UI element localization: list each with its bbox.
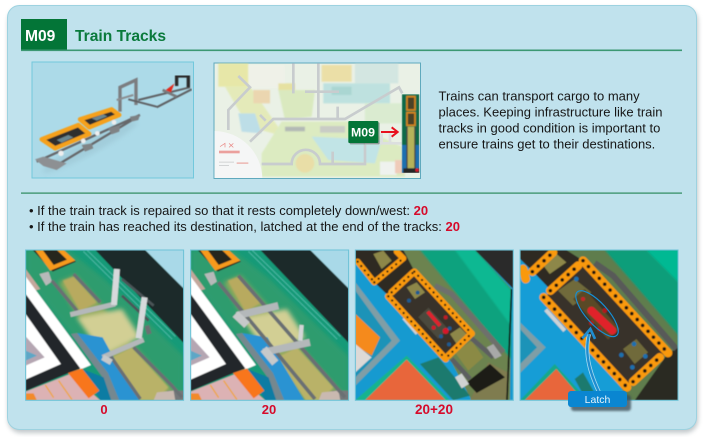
heading: Train Tracks: Train Tracks <box>75 28 166 45</box>
text block: scoring rules <box>29 203 460 234</box>
arrow: to mission location <box>381 127 398 137</box>
text block: mission description: ensure trains get to their destinations. <box>438 136 655 152</box>
text block: scoring rules: • If the train has reached its destination, latched at the end of the tracks: 20 <box>29 219 460 234</box>
label: M09 on map <box>348 121 380 144</box>
arrow: points to latch <box>582 329 599 392</box>
image: field map with M09 location <box>214 63 420 178</box>
annotation: latch ellipse <box>569 285 625 343</box>
photo: track not repaired, 0 points <box>26 250 184 400</box>
score label: 20+20: 20+20 <box>415 402 453 417</box>
header: mission number badge: M09 <box>25 28 56 45</box>
label: Latch: Latch <box>585 394 611 406</box>
photo: latch close-up <box>520 250 682 400</box>
score label: 20: 20 <box>262 402 276 417</box>
text block: mission description: places. Keeping infrastructure like train <box>438 104 663 120</box>
divider <box>21 192 682 194</box>
header rule <box>21 50 682 51</box>
label: Latch <box>568 391 631 411</box>
photo: track repaired, 20 points <box>191 250 349 400</box>
score label: 0: 0 <box>100 402 108 417</box>
image: train track model <box>32 62 194 178</box>
text block: scoring rules: • If the train track is repaired so that it rests completely down/west: 20 <box>29 203 428 218</box>
text block: mission description: tracks in good condition is important to <box>438 120 660 136</box>
label: M09 on map: M09 <box>351 126 375 140</box>
header: mission number badge <box>21 19 67 50</box>
photo: train at destination, close view <box>355 250 513 400</box>
text block: mission description: Trains can transport cargo to many <box>438 88 640 104</box>
